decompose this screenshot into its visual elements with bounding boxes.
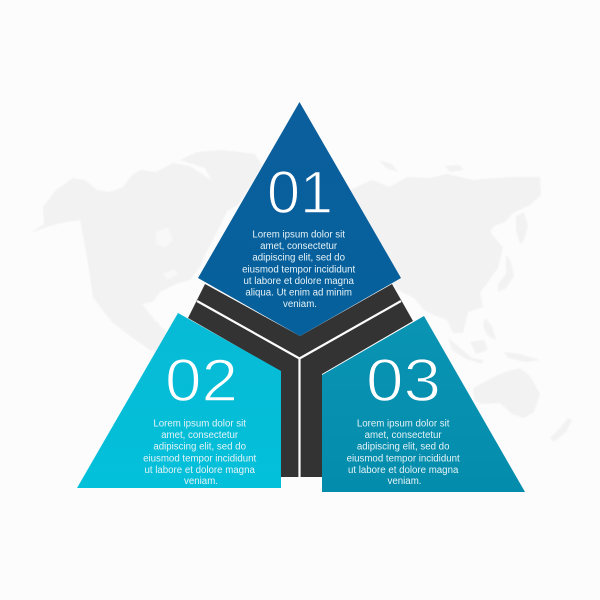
map: Arctic islands and Greenland [180,150,262,212]
map: Novaya Zemlya [445,165,464,172]
dark centre hub [188,284,413,477]
map: Europe and Asia [350,174,541,333]
panel 3 text: veniam. [388,476,421,487]
map: Sumatra and Java [448,338,484,364]
map: New Guinea [504,352,540,362]
panel 3 text: eiusmod tempor incididunt [347,453,460,464]
map: Philippines [483,318,496,340]
world map [30,150,572,442]
map: Japan [498,254,514,292]
panel 3 text: amet, consectetur [365,430,442,441]
panel 2 text: ut labore et dolore magna [144,465,255,476]
panel 3 text: ut labore et dolore magna [348,465,459,476]
map: Gulf of Mexico [142,298,176,322]
panel 2 text: adipiscing elit, sed do [153,442,246,453]
panel 3 text: adipiscing elit, sed do [357,442,449,453]
panel 1 text: ut labore et dolore magna [243,276,354,287]
hub dividers [197,301,401,477]
map: Borneo [470,340,488,354]
panel 2: left shape [77,313,281,488]
panel 1 text: eiusmod tempor incididunt [242,264,355,275]
number 02: 02 [165,347,238,414]
panel 2 text: amet, consectetur [161,430,239,441]
panel 1 text: aliqua. Ut enim ad minim [245,288,352,298]
panel 3 text: Lorem ipsum dolor sit [357,418,450,430]
panel 1 text: adipiscing elit, sed do [252,253,345,264]
panel 3: right shape [322,316,525,492]
map: Kamchatka [516,212,528,244]
number 01: 01 [267,159,333,226]
map: Hudson Bay [156,227,173,248]
panel 2 text: veniam. [184,476,218,487]
panel 1 text: amet, consectetur [260,241,338,252]
map: New Zealand [550,418,572,442]
panel 2 text: Lorem ipsum dolor sit [153,418,246,430]
panel 2 text: eiusmod tempor incididunt [143,453,256,464]
map: Russian Arctic island [379,160,398,172]
number 03: 03 [366,347,441,414]
map: North America [30,163,230,356]
map: Great Lakes [162,269,179,280]
map: Australia [473,368,540,418]
panel 1 text: Lorem ipsum dolor sit [252,230,345,240]
panel 1 text: veniam. [283,299,317,310]
panel 1: top triangle [198,102,401,336]
